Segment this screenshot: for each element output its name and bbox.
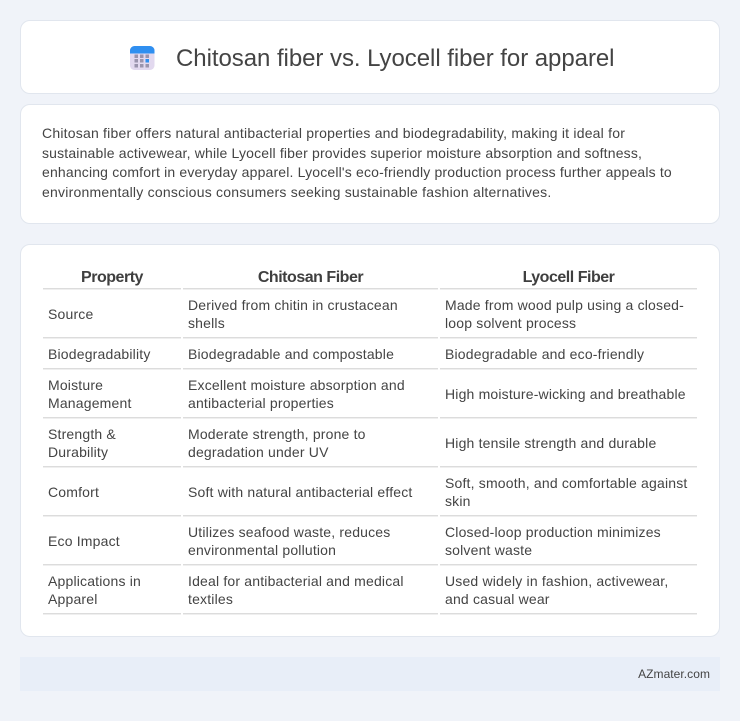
table rows: Source: [48, 306, 93, 322]
table rows: High moisture-wicking and breathable: [445, 386, 686, 402]
table rows: Durability: [48, 444, 108, 460]
footer credit: AZmater.com: [638, 667, 710, 681]
table rows: shells: [188, 315, 225, 331]
table header: [81, 269, 615, 286]
table rows: Made from wood pulp using a closed-: [445, 297, 684, 313]
table rows: Utilizes seafood waste, reduces: [188, 524, 390, 540]
table rows: Soft with natural antibacterial effect: [188, 484, 412, 500]
title: Chitosan fiber vs. Lyocell fiber for apparel: [176, 45, 614, 72]
icon: calendar: [130, 46, 154, 70]
comparison table: [43, 269, 697, 615]
table rows: Moisture: [48, 377, 103, 393]
table rows: Apparel: [48, 591, 98, 607]
table rows: Biodegradability: [48, 346, 150, 362]
table rows: Closed-loop production minimizes: [445, 524, 661, 540]
header panel: [20, 20, 720, 94]
intro text: Chitosan fiber offers natural antibacterial properties and biodegradability, making it ideal for: [42, 125, 625, 141]
table rows: Biodegradable and compostable: [188, 346, 394, 362]
intro text: sustainable activewear, while Lyocell fiber provides superior moisture absorption and softness,: [42, 145, 642, 161]
table rows: Biodegradable and eco-friendly: [445, 346, 644, 362]
table rows: Excellent moisture absorption and: [188, 377, 405, 393]
table rows: Management: [48, 395, 132, 411]
intro text: [42, 125, 672, 200]
table header: Property: [81, 269, 143, 286]
table rows: solvent waste: [445, 542, 532, 558]
table rows: Applications in: [48, 573, 141, 589]
table panel: [20, 244, 720, 637]
table rows: Soft, smooth, and comfortable against: [445, 475, 687, 491]
table rows: Comfort: [48, 484, 99, 500]
table rows: textiles: [188, 591, 233, 607]
table rows: environmental pollution: [188, 542, 336, 558]
table rows: Eco Impact: [48, 533, 120, 549]
table rows: Derived from chitin in crustacean: [188, 297, 398, 313]
table header: Chitosan Fiber: [258, 269, 363, 286]
table rows: Strength &: [48, 426, 116, 442]
table rows: High tensile strength and durable: [445, 435, 656, 451]
table rows: antibacterial properties: [188, 395, 334, 411]
intro panel: [20, 104, 720, 224]
footer bar: [20, 657, 720, 691]
intro text: environmentally conscious consumers seeking sustainable fashion alternatives.: [42, 184, 552, 200]
table rows: degradation under UV: [188, 444, 329, 460]
table rows: Moderate strength, prone to: [188, 426, 366, 442]
table rows: Ideal for antibacterial and medical: [188, 573, 404, 589]
table rows: and casual wear: [445, 591, 550, 607]
table rows: Used widely in fashion, activewear,: [445, 573, 668, 589]
table rows: loop solvent process: [445, 315, 576, 331]
intro text: enhancing comfort in everyday apparel. Lyocell's eco-friendly production process further appeals to: [42, 164, 672, 180]
table header: Lyocell Fiber: [523, 269, 614, 286]
table rows: skin: [445, 493, 471, 509]
